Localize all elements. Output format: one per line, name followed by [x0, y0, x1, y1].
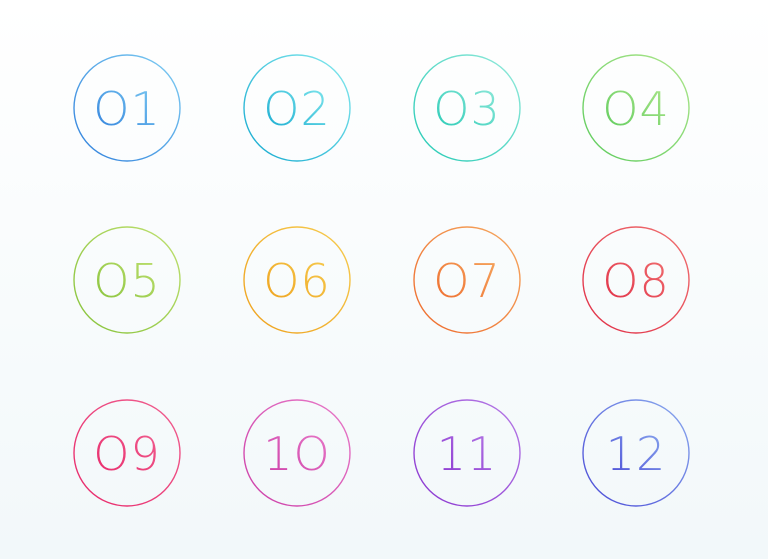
- badge 07: [414, 227, 520, 333]
- badge 02: O2: [263, 82, 331, 136]
- badge 04: [583, 55, 689, 161]
- badge 02: [244, 55, 350, 161]
- badge 10: [244, 400, 350, 506]
- badge 03: O3: [433, 82, 501, 136]
- badge 06: O6: [263, 254, 331, 308]
- badge 12: [583, 400, 689, 506]
- badge 04: O4: [602, 82, 670, 136]
- badge 03: [414, 55, 520, 161]
- badge 09: [74, 400, 180, 506]
- badge 08: O8: [602, 254, 670, 308]
- badge 05: [74, 227, 180, 333]
- badge 01: O1: [93, 82, 161, 136]
- badge 01: [74, 55, 180, 161]
- badge 11: 11: [437, 427, 497, 481]
- badge 08: [583, 227, 689, 333]
- badge 06: [244, 227, 350, 333]
- badge 10: 1O: [263, 427, 331, 481]
- badge 05: O5: [93, 254, 161, 308]
- badge 09: O9: [93, 427, 161, 481]
- badge 07: O7: [433, 254, 501, 308]
- badge 12: 12: [606, 427, 666, 481]
- badge 11: [414, 400, 520, 506]
